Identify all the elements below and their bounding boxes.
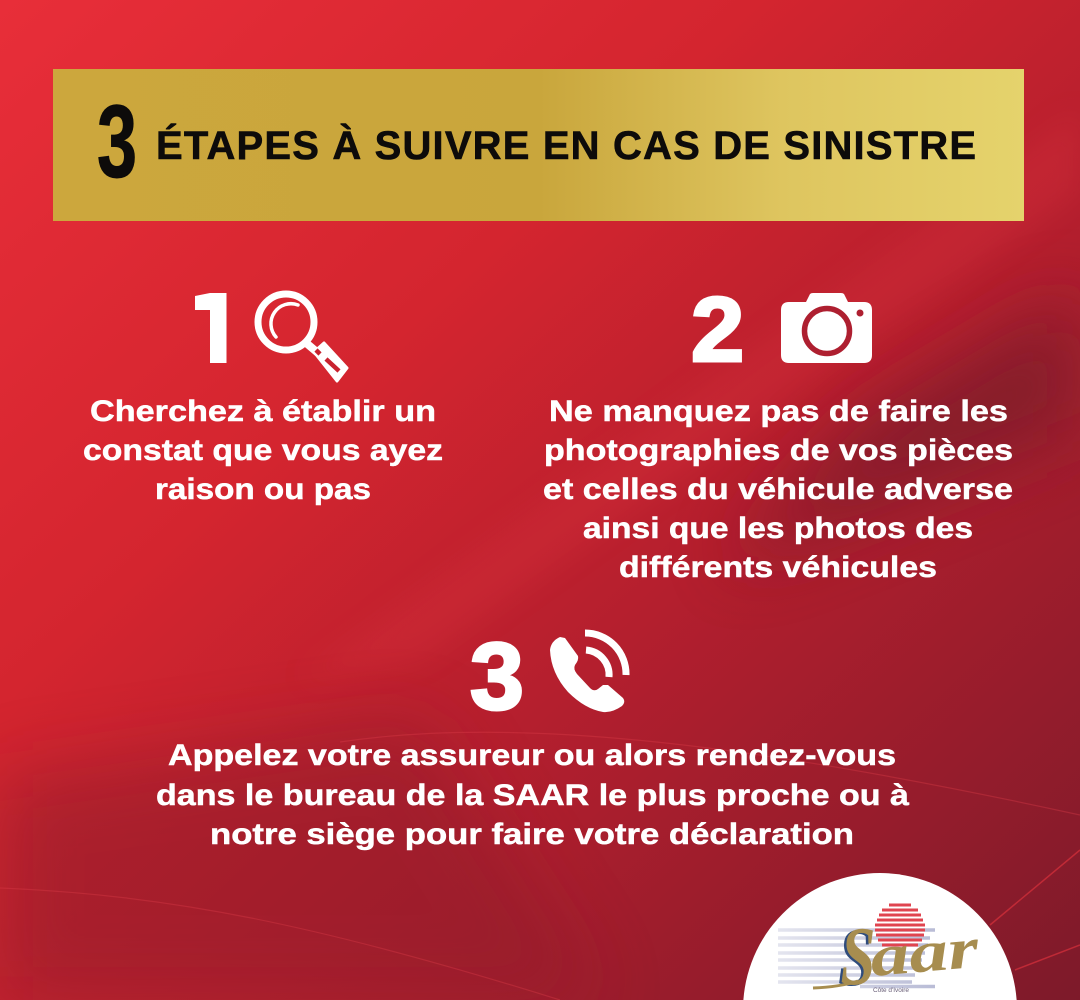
step 3 <box>156 624 909 851</box>
logo wordmark: aar <box>867 915 981 989</box>
icon: phone with signal <box>550 633 626 712</box>
big number 3: 3 <box>97 84 137 199</box>
logo red sun <box>875 905 925 945</box>
number 2: 2 <box>691 278 744 381</box>
step 2 text: Ne manquez pas de faire les <box>549 395 1008 428</box>
step 2 text: et celles du véhicule adverse <box>543 473 1013 506</box>
step 2 text: photographies de vos pièces <box>544 434 1013 467</box>
step 2 text <box>543 395 1013 584</box>
title banner <box>53 69 1024 221</box>
step 3 text: notre siège pour faire votre déclaration <box>210 818 854 851</box>
step 3 text: dans le bureau de la SAAR le plus proche ou à <box>156 779 909 812</box>
logo gray stripes <box>778 930 935 986</box>
logo tagline: Côte d'Ivoire <box>873 987 909 994</box>
step 2 text: ainsi que les photos des <box>583 512 973 545</box>
logo: SAAR Côte d'Ivoire <box>743 873 1017 1000</box>
step 1 text: raison ou pas <box>155 473 371 506</box>
logo wordmark <box>813 910 981 1000</box>
number 1 <box>195 293 226 363</box>
number 3: 3 <box>470 624 524 730</box>
step 3 text: Appelez votre assureur ou alors rendez-vous <box>168 739 896 772</box>
step 1 text: Cherchez à établir un <box>90 395 436 428</box>
number 1: 1 <box>186 279 232 382</box>
step 3 text <box>156 739 909 851</box>
title text: ÉTAPES À SUIVRE EN CAS DE SINISTRE <box>156 123 976 168</box>
step 1 text: constat que vous ayez <box>83 434 443 467</box>
step 1 <box>83 279 443 506</box>
icon: magnifying glass <box>258 294 347 381</box>
icon: camera <box>781 293 872 363</box>
step 1 text <box>83 395 443 506</box>
step 2 <box>543 278 1013 584</box>
step 2 text: différents véhicules <box>619 551 937 584</box>
